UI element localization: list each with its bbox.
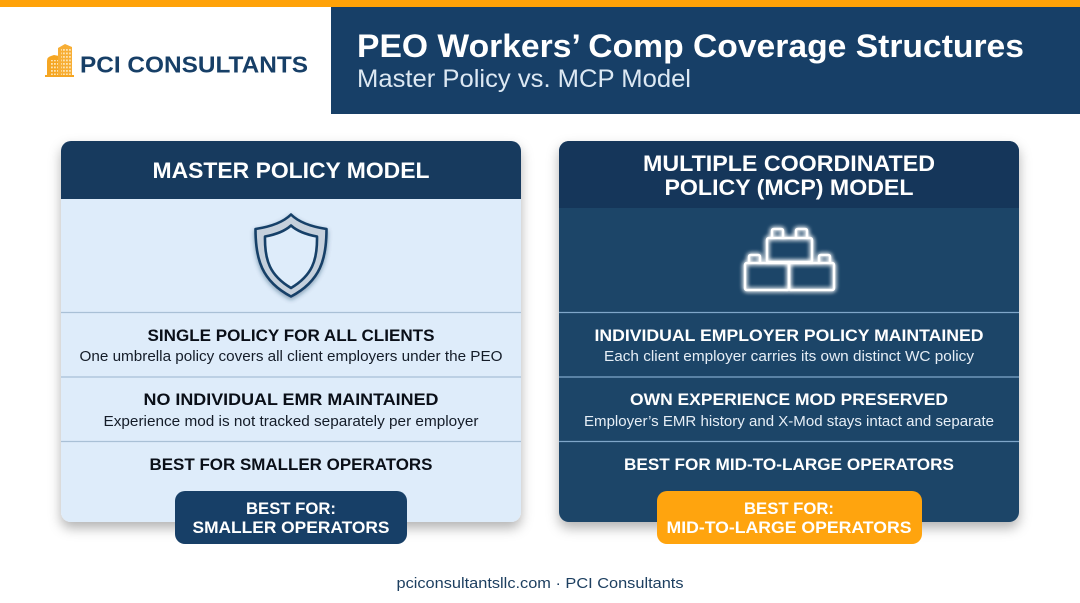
header banner	[331, 7, 1080, 114]
badge: smaller operators: BEST FOR:	[246, 499, 336, 518]
icon: shield	[256, 214, 326, 296]
row: individual policy: Each client employer carries its own distinct WC policy	[604, 349, 975, 365]
panel heading bar	[559, 141, 1019, 208]
panel heading: POLICY (MCP) MODEL	[664, 175, 914, 200]
icon: buildings	[45, 44, 74, 77]
panel: MCP model	[559, 141, 1019, 544]
row: single policy	[80, 326, 502, 365]
divider lines	[559, 312, 1019, 442]
row: own experience mod: OWN EXPERIENCE MOD PRESERVED	[630, 390, 948, 409]
top accent bar	[0, 0, 1080, 7]
footer: pciconsultantsllc.com · PCI Consultants	[396, 575, 684, 592]
panel: master policy model	[61, 141, 521, 544]
title: PEO Workers’ Comp Coverage Structures	[357, 28, 1024, 64]
subtitle: Master Policy vs. MCP Model	[357, 65, 691, 93]
row: best for smaller: BEST FOR SMALLER OPERATORS	[150, 455, 432, 474]
badge: mid-to-large operators: MID-TO-LARGE OPERATORS	[666, 518, 912, 537]
divider lines	[61, 312, 521, 442]
row: no EMR	[104, 390, 479, 430]
row: best for mid-to-large: BEST FOR MID-TO-LARGE OPERATORS	[624, 455, 954, 474]
panel heading	[643, 151, 935, 200]
row: no EMR: NO INDIVIDUAL EMR MAINTAINED	[144, 390, 438, 409]
row: single policy: One umbrella policy covers all client employers under the PEO	[80, 349, 502, 365]
row: own experience mod: Employer’s EMR history and X-Mod stays intact and separate	[584, 414, 994, 430]
row: own experience mod	[584, 390, 994, 430]
row: individual policy: INDIVIDUAL EMPLOYER POLICY MAINTAINED	[594, 326, 984, 345]
badge: mid-to-large operators	[657, 491, 922, 544]
badge: smaller operators	[175, 491, 407, 544]
badge: smaller operators: SMALLER OPERATORS	[192, 518, 390, 537]
icon: building blocks	[745, 229, 834, 290]
logo	[45, 44, 308, 78]
panel heading: MULTIPLE COORDINATED	[643, 151, 935, 176]
panel heading bar	[61, 141, 521, 199]
row: individual policy	[594, 326, 984, 365]
badge: mid-to-large operators: BEST FOR:	[744, 499, 834, 518]
panel heading: MASTER POLICY MODEL	[152, 158, 430, 183]
row: single policy: SINGLE POLICY FOR ALL CLIENTS	[148, 326, 434, 345]
row: no EMR: Experience mod is not tracked separately per employer	[104, 414, 479, 430]
logo wordmark: PCI CONSULTANTS	[80, 52, 308, 78]
